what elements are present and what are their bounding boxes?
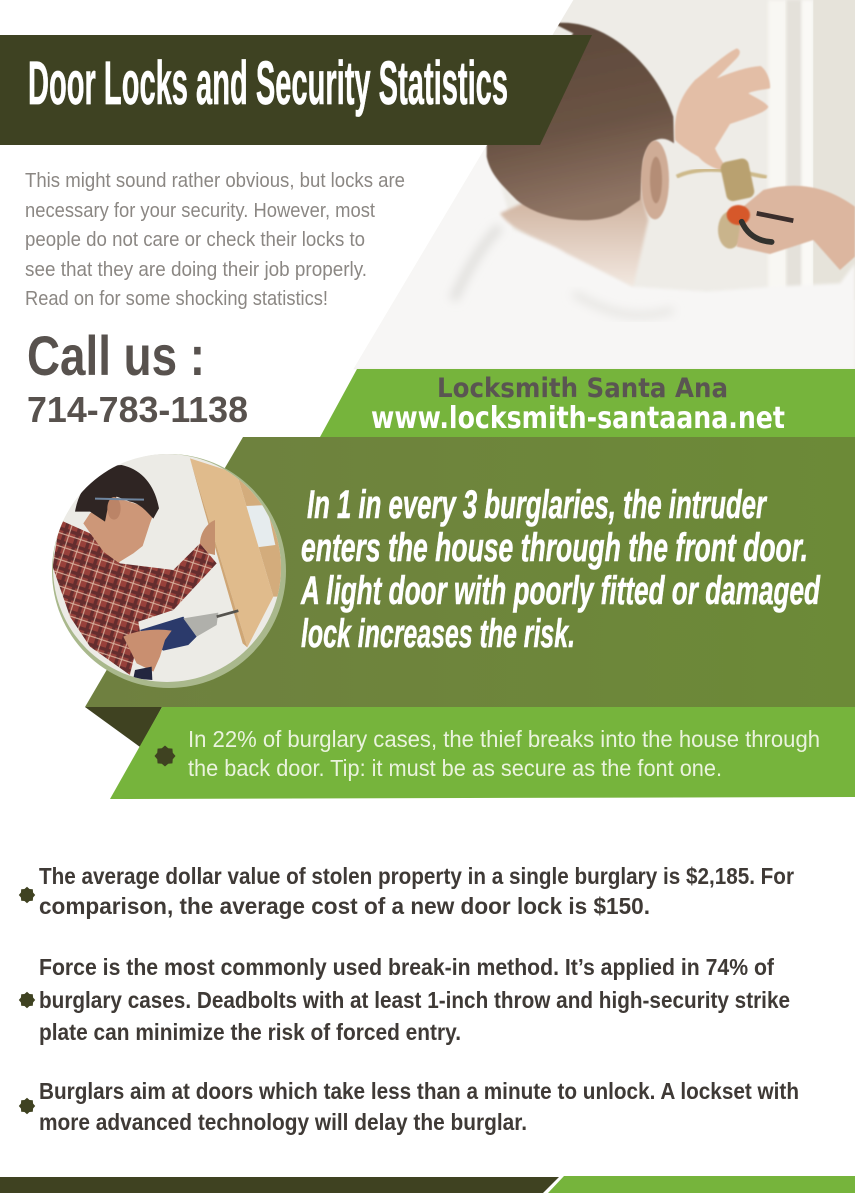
call to action: phone number xyxy=(27,324,248,430)
intro paragraph: see that they are doing their job properly. xyxy=(25,258,367,281)
fact: time to unlock: more advanced technology will delay the burglar. xyxy=(39,1109,527,1135)
circular ring behind worker photo xyxy=(52,454,286,688)
back door text xyxy=(188,726,820,781)
statistic text xyxy=(300,483,821,656)
fact: stolen property value xyxy=(19,863,794,919)
intro paragraph: This might sound rather obvious, but locks are xyxy=(25,169,405,192)
intro paragraph xyxy=(25,169,405,310)
green contact band xyxy=(320,369,855,437)
footer bar xyxy=(0,1176,855,1193)
photo: worker drilling a door xyxy=(53,454,281,682)
intro paragraph: necessary for your security. However, most xyxy=(25,199,375,222)
icon: bullet xyxy=(19,992,35,1008)
call to action: phone number: 714-783-1138 xyxy=(27,389,248,430)
fact: forced entry: plate can minimize the risk of forced entry. xyxy=(39,1019,461,1045)
back door text: the back door. Tip: it must be as secure as the font one. xyxy=(188,755,722,781)
panel: front door statistic xyxy=(85,437,855,707)
fact: forced entry: burglary cases. Deadbolts with at least 1-inch throw and high-security strike xyxy=(39,987,790,1013)
fact: stolen property value: comparison, the average cost of a new door lock is $150. xyxy=(39,893,650,919)
statistic text: lock increases the risk. xyxy=(301,612,575,656)
ribbon fold shadow xyxy=(85,707,162,747)
fact: forced entry xyxy=(19,954,790,1045)
icon: bullet xyxy=(19,1098,35,1114)
intro paragraph: people do not care or check their locks to xyxy=(25,228,365,251)
company name: Locksmith Santa Ana xyxy=(437,373,728,404)
fact: stolen property value: The average dollar value of stolen property in a single burglary is $2,185. For xyxy=(39,863,794,889)
panel: back door statistic xyxy=(110,707,855,799)
title banner xyxy=(0,35,592,145)
icon: bullet xyxy=(19,887,35,903)
back door text: In 22% of burglary cases, the thief breaks into the house through xyxy=(188,726,820,752)
intro paragraph: Read on for some shocking statistics! xyxy=(25,287,328,310)
website: www.locksmith-santaana.net xyxy=(371,401,785,436)
icon: bullet xyxy=(154,746,176,766)
photo: locksmith working on door handle xyxy=(340,0,855,369)
call to action: phone number: Call us : xyxy=(27,324,205,387)
fact: time to unlock xyxy=(19,1078,799,1135)
fact: forced entry: Force is the most commonly used break-in method. It’s applied in 74% of xyxy=(39,954,774,980)
